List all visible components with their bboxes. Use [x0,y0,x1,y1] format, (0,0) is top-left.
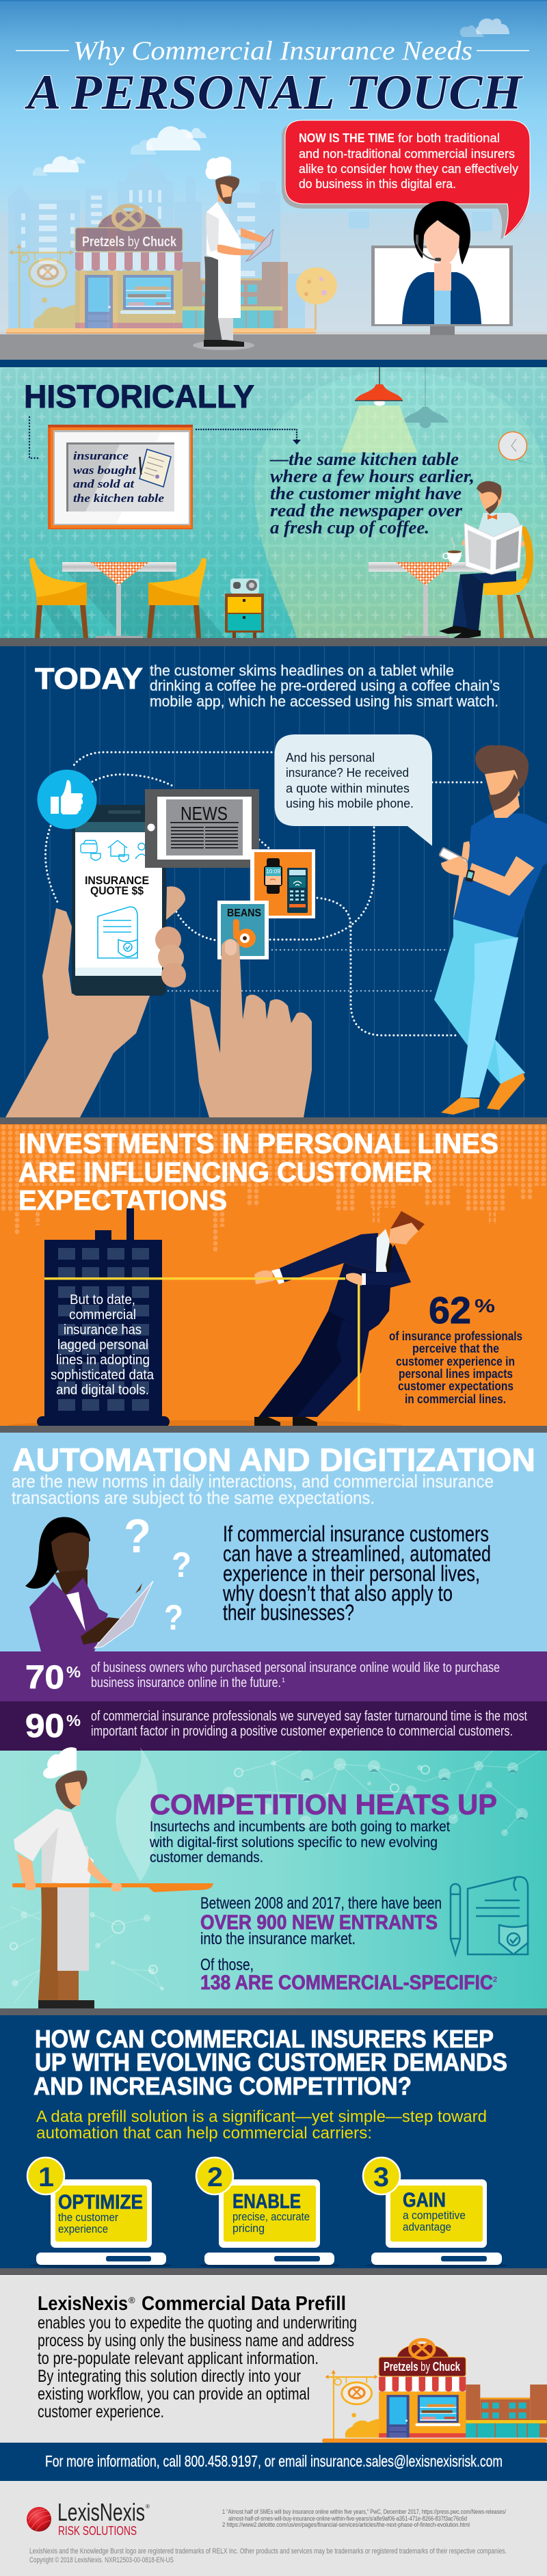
man reading newspaper [439,481,534,639]
heading: HISTORICALLY [24,378,254,414]
heading: AUTOMATION AND DIGITIZATION [12,1442,535,1478]
note text: was bought [73,464,137,477]
right chair [147,558,206,638]
icon: policy document [139,449,171,487]
product heading [38,2293,346,2315]
heading: UP WITH EVOLVING CUSTOMER DEMANDS [35,2048,507,2076]
icon: pen and document [451,1877,528,1954]
stat band: 70%: 70 [25,1660,64,1696]
businessman pulling rope [44,1211,425,1426]
product heading: ® [129,2295,135,2305]
question text: their businesses? [223,1600,354,1625]
heading: TODAY [35,662,143,695]
panel: historically [0,367,547,639]
icon: clouds [33,18,509,176]
speech bubble: And his personal [286,751,375,765]
stat band: 70%: 1 [282,1677,285,1684]
intro text: the customer skims headlines on a tablet while [150,662,454,679]
note text: insurance [73,449,129,462]
speech bubble: insurance? He received [286,766,409,780]
quote text: a fresh cup of coffee. [270,518,429,537]
callout: now is the time: alike to consider how they can effectively [299,162,518,176]
right hand pointing [190,939,312,1117]
note text: and sold at [73,477,135,490]
panel: today [0,646,547,1117]
rope [44,1277,360,1411]
step 3: gain: advantage [403,2220,451,2233]
legal text [29,2547,507,2564]
card: beans app [217,901,269,959]
left chair [29,558,88,638]
icon: question marks: ? [124,1509,151,1563]
heading: INVESTMENTS IN PERSONAL LINES [18,1128,498,1159]
product body: enables you to expedite the quoting and underwriting [38,2313,357,2333]
new entrants stat: Between 2008 and 2017, there have been [200,1894,442,1913]
stat: 62%: customer experience in [396,1355,515,1368]
legal text: Copyright © 2018 LexisNexis. NXR12503-00-0818-EN-US [29,2556,174,2564]
stat: 62%: customer expectations [398,1379,513,1393]
quote text: the customer might have [270,483,462,503]
body text: Insurtechs and incumbents are both going to market [150,1818,450,1835]
stat: 62% [389,1289,522,1406]
stat band: 70%: business insurance online in the future. [91,1675,281,1690]
step 2: enable [196,2157,341,2268]
phone label [85,874,149,897]
grey bar [0,1117,547,1124]
heading [34,2025,507,2100]
stat: 62%: personal lines impacts [399,1367,513,1381]
footnotes: almost-half-of-smes-will-buy-insurance-online-within-five-years/s/a8e9af06-a351-471e-8266-837f3ac76c6d [228,2515,467,2523]
logo: ® [146,2504,150,2510]
icon: question marks: ? [164,1598,183,1638]
product heading: Commercial Data Prefill [142,2293,346,2315]
new entrants stat: 2 [493,1976,497,1984]
step 3: gain [363,2157,507,2268]
panel: competition [0,1747,547,2008]
stat band: 70% [0,1651,547,1701]
card: smart watch and payment terminal [250,849,315,918]
body text: customer demands. [150,1849,263,1865]
stat band: 70%: % [66,1663,81,1681]
product heading: LexisNexis [38,2293,128,2315]
card: beans app: BEANS [227,907,261,919]
quote text: where a few hours earlier, [270,466,475,486]
heading: EXPECTATIONS [18,1184,227,1216]
step 2: enable: ENABLE [232,2190,301,2213]
note text [73,449,165,505]
bakery storefront [322,2339,547,2443]
right table [369,537,483,639]
chef with tablet [193,157,274,350]
panel: investments [0,1124,547,1431]
monitor with agent [371,201,513,335]
speech bubble: a quote within minutes [286,782,410,795]
building [7,1208,403,1431]
step 2: enable: 2 [207,2162,223,2192]
body text: with digital-first solutions specific to new evolving [149,1834,438,1850]
icon: coffee cup [443,537,462,563]
divider band [0,360,547,367]
question text [222,1522,491,1625]
new entrants stat [200,1894,497,1994]
shop sign text: Pretzels by Chuck [82,235,177,250]
heading: HOW CAN COMMERCIAL INSURERS KEEP [35,2025,494,2053]
heading [18,1128,498,1216]
new entrants stat: OVER 900 NEW ENTRANTS [200,1911,438,1934]
product body: By integrating this solution directly into your [38,2367,301,2386]
subheading [36,2108,487,2142]
heading: ARE INFLUENCING CUSTOMER [18,1156,432,1188]
title line 2: A PERSONAL TOUCH [25,65,523,120]
footnotes [222,2508,506,2529]
bakery storefront: Pretzels by Chuck [384,2360,461,2374]
quote text [269,449,475,537]
contact bar [0,2443,547,2481]
lamps [341,367,449,453]
phone [72,805,166,996]
building text: commercial [69,1307,136,1323]
grey bar [0,2008,547,2015]
bakery storefront [6,206,316,334]
background city skyline [0,159,547,334]
subheading: automation that can help commercial carriers: [36,2124,372,2142]
heading: AND INCREASING COMPETITION? [34,2072,412,2100]
callout: now is the time: for both traditional [398,131,500,145]
icon: thumbs up [37,770,97,829]
dotted connectors [45,752,485,1035]
step 2: enable: pricing [232,2222,265,2235]
title line 1: Why Commercial Insurance Needs [73,36,472,66]
icon: document with shield [98,907,137,958]
dotted arrow [196,429,301,444]
left table and chairs [29,558,226,639]
left hand holding phone [5,805,186,1117]
product body: customer experience. [38,2402,164,2421]
stat: 62%: of insurance professionals [389,1329,522,1343]
ground [0,332,547,360]
radio cabinet [225,579,264,638]
intro text [150,662,500,710]
stat: 62%: 62 [429,1289,471,1331]
icons: car, home, person [81,840,148,862]
phone label: QUOTE $$ [90,884,144,897]
product body: to pre-populate relevant applicant information. [38,2349,319,2368]
grey bar [0,638,547,646]
stat band: 90%: 90 [25,1708,64,1744]
stat band: 90%: % [66,1712,81,1729]
building text [51,1292,155,1398]
panel: how can insurers keep up [0,2015,547,2268]
quote text: read the newspaper over [270,501,463,520]
tablet: news [145,789,259,868]
logo: LexisNexis [57,2498,145,2526]
product body [38,2313,357,2421]
phone label: INSURANCE [85,874,149,887]
tree [296,267,337,330]
stat band: 90% [0,1701,547,1751]
step 3: gain: a competitive [403,2209,466,2222]
step 3: gain: GAIN [403,2189,446,2212]
subheading: are the new norms in daily interactions, and commercial insurance [12,1471,494,1491]
new entrants stat: Of those, [200,1956,254,1974]
body text [149,1818,450,1865]
step 1: optimize: the customer [58,2211,118,2224]
chef with peel [12,1747,213,2008]
new entrants stat: into the insurance market. [200,1930,356,1948]
quote text: —the same kitchen table [269,449,459,469]
note text: the kitchen table [73,492,165,505]
building text: and digital tools. [56,1382,149,1398]
step 1: optimize [27,2157,172,2268]
intro text: mobile app, which he accessed using his smart watch. [150,693,498,710]
speech bubble: using his mobile phone. [286,797,414,810]
panel: automation [0,1433,547,1751]
subheading [12,1471,494,1508]
building text: lagged personal [57,1337,148,1353]
subheading: transactions are subject to the same expectations. [12,1487,375,1508]
steam [116,1747,157,1882]
callout: now is the time: and non-traditional commercial insurers [299,147,515,161]
subheading: A data prefill solution is a significant—yet simple—step toward [36,2108,487,2126]
woman with tablet [25,1509,191,1651]
network background [0,1751,540,2004]
callout: now is the time [282,120,530,239]
step 1: optimize: OPTIMIZE [58,2191,143,2214]
logo [27,2498,150,2538]
callout: now is the time: do business in this digital era. [299,177,456,191]
building text: insurance has [64,1322,142,1338]
callout: now is the time: NOW IS THE TIME [299,131,395,145]
logo: RISK SOLUTIONS [58,2524,137,2538]
panel: hero [0,0,547,360]
panel: footer [0,2481,547,2576]
new entrants stat: 138 ARE COMMERCIAL-SPECIFIC [200,1971,493,1994]
grey bar [0,1426,547,1433]
icon: clock [499,432,537,465]
question text: why doesn’t that also apply to [222,1581,453,1606]
speech bubble [275,734,432,846]
man with phone [434,745,547,1115]
footnotes: 2 https://www2.deloitte.com/us/en/pages/financial-services/articles/the-next-phase-of-fintech-evolution.html [222,2521,470,2529]
panel: product description [0,2276,547,2443]
stat: 62%: in commercial lines. [405,1392,506,1406]
dotted connector [29,417,38,458]
step 2: enable: precise, accurate [232,2210,310,2223]
grey bar [0,2268,547,2275]
product body: existing workflow, you can provide an optimal [38,2385,310,2404]
step 1: optimize: 1 [38,2162,54,2192]
stat: 62%: % [475,1295,495,1316]
building text: sophisticated data [51,1367,155,1383]
title [16,36,529,120]
card: smart watch and payment terminal: 10:09 [266,868,281,875]
product body: process by using only the business name and address [38,2331,354,2350]
heading: COMPETITION HEATS UP [150,1788,497,1820]
building text: But to date, [70,1292,135,1307]
intro text: drinking a coffee he pre-ordered using a coffee chain’s [150,677,500,694]
tablet: news: NEWS [181,803,228,824]
question text: experience in their personal lives, [223,1561,480,1586]
building text: lines in adopting [56,1352,150,1368]
stat: 62%: perceive that the [412,1342,499,1355]
icon: question marks: ? [172,1545,191,1585]
framed note [48,425,193,529]
step 3: gain: 3 [373,2162,389,2192]
step 1: optimize: experience [58,2222,108,2235]
icon: question marks [124,1509,191,1638]
